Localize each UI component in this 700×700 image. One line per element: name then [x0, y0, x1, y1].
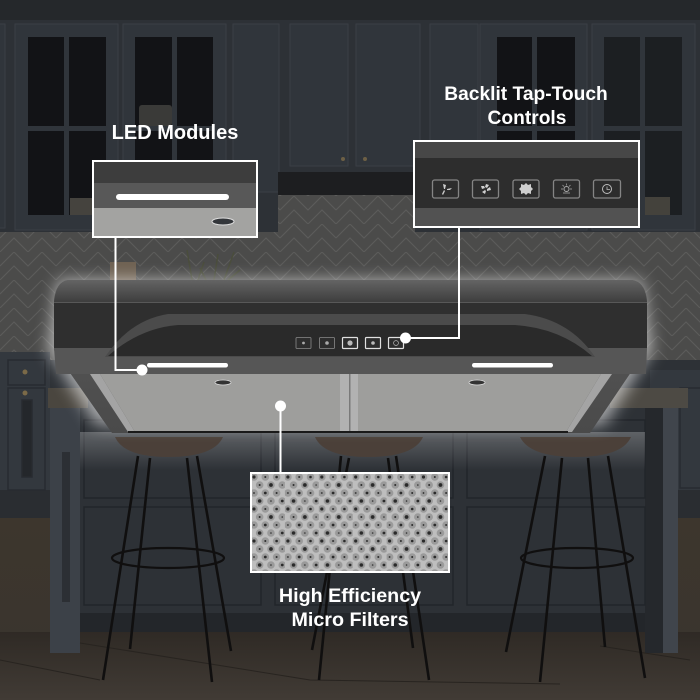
curved control panel — [105, 314, 595, 357]
heading: backlit tap-touch controls: Controls — [488, 108, 566, 129]
leader line — [280, 406, 282, 473]
marker dot — [136, 364, 148, 376]
leader line — [116, 236, 142, 370]
heading: high efficiency micro filters: Micro Filters — [291, 609, 409, 631]
callout: micro filters — [251, 400, 449, 631]
touch control buttons — [296, 338, 404, 348]
hood lights — [215, 380, 231, 385]
center divider — [340, 374, 358, 432]
callout: backlit controls — [400, 84, 639, 344]
detail box — [414, 141, 639, 227]
heading: backlit tap-touch controls: Backlit Tap-Touch — [444, 84, 608, 105]
base cabinets — [0, 352, 700, 518]
range hood — [54, 280, 647, 433]
upper cabinets — [0, 0, 700, 232]
control icons — [432, 180, 620, 198]
callout: LED modules — [93, 122, 257, 376]
backsplash — [0, 195, 700, 360]
detail box: mesh — [251, 473, 449, 572]
heading: high efficiency micro filters: High Efficiency — [279, 585, 421, 607]
lower trim — [54, 348, 647, 374]
shelf dishes — [70, 105, 670, 215]
left filter — [100, 374, 341, 432]
detail box — [93, 161, 257, 237]
right filter — [358, 374, 601, 432]
floor — [0, 518, 700, 700]
bar stools — [103, 437, 645, 682]
hood body — [54, 280, 647, 433]
heading: LED modules: LED Modules — [112, 122, 238, 144]
range hood glow — [48, 280, 652, 425]
LED strips — [147, 363, 553, 368]
island — [48, 388, 688, 653]
dark front band — [54, 303, 647, 348]
marker dot — [275, 400, 286, 412]
side rails — [90, 374, 135, 432]
leader line — [405, 227, 459, 338]
marker dot — [400, 332, 411, 344]
